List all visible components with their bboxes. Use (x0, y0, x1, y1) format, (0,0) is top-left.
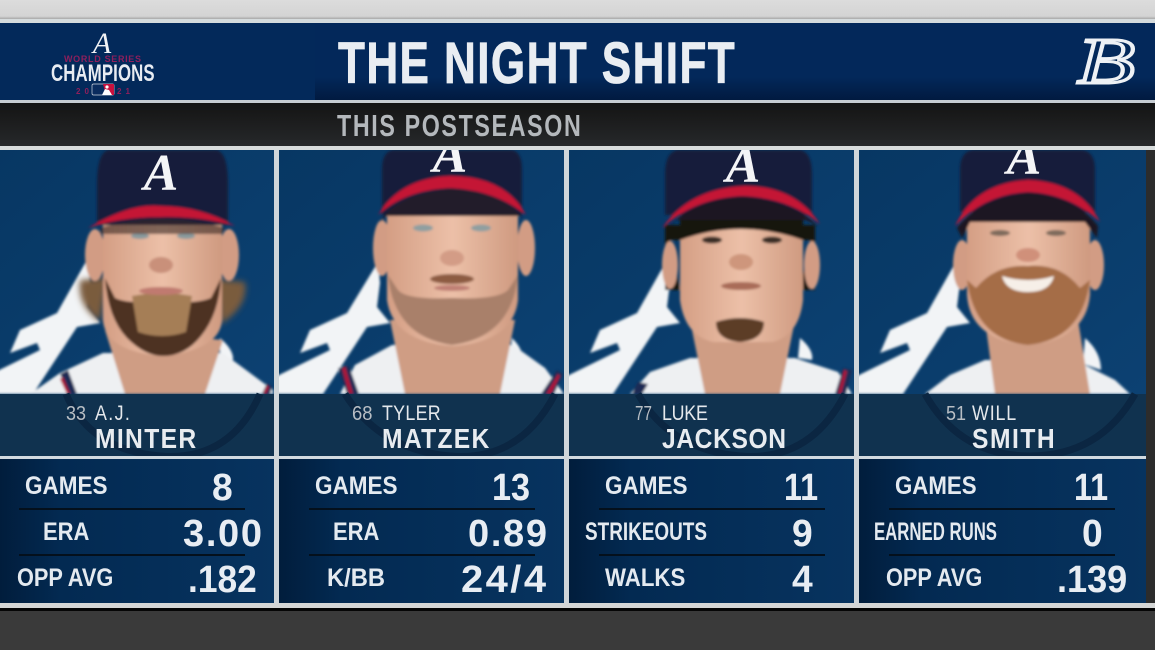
swoosh (855, 258, 970, 394)
panel: Minter photo (0, 145, 274, 394)
last name: JACKSON (662, 423, 786, 454)
stat: opp avg (17, 558, 257, 600)
stat: games (605, 467, 818, 509)
card: Matzek name (279, 394, 564, 456)
title: THE NIGHT SHIFT (338, 30, 735, 95)
stat: opp avg: .182 (188, 558, 257, 600)
stat: games: 13 (492, 465, 530, 508)
stat: opp avg (886, 557, 1127, 600)
stats: Smith (859, 459, 1146, 603)
stat: earned runs: EARNED RUNS (874, 518, 997, 546)
stat: opp avg: .139 (1057, 557, 1127, 600)
jersey number: 33 (66, 403, 86, 425)
logo: Braves World Series Champions: A (91, 27, 112, 60)
panel: Smith photo (855, 129, 1146, 394)
stat: walks: 4 (792, 558, 813, 600)
jersey number: 68 (352, 403, 372, 425)
first name: WILL (972, 402, 1016, 425)
stat: games (895, 467, 1108, 509)
stat: opp avg: OPP AVG (886, 564, 982, 591)
stat: earned runs: 0 (1082, 512, 1103, 554)
stat: era: ERA (333, 518, 379, 545)
stat: games: GAMES (25, 472, 107, 500)
stat: games: 8 (212, 466, 233, 508)
cap logo: A (430, 127, 467, 184)
stat: games: 11 (784, 467, 818, 509)
logo: Braves World Series Champions: 20 (76, 87, 90, 96)
cap logo: A (141, 145, 178, 202)
card: Jackson name (569, 394, 854, 456)
jersey number: 51 (946, 403, 966, 425)
stat: era (333, 513, 547, 555)
stat: walks: WALKS (605, 565, 685, 592)
subtitle band (0, 103, 1155, 146)
logo: Braves World Series Champions (51, 27, 155, 96)
last name: MINTER (95, 423, 196, 454)
stat: era: 0.89 (468, 513, 547, 555)
stats: Minter (0, 459, 274, 603)
logo: Braves World Series Champions: WORLD SERIES (64, 54, 141, 64)
jersey number: 77 (635, 402, 652, 425)
stat: games: 11 (1074, 467, 1108, 509)
stat: games: GAMES (315, 472, 397, 500)
last name: SMITH (972, 423, 1055, 454)
stat: opp avg: OPP AVG (17, 564, 113, 591)
swoosh (0, 258, 100, 394)
logo: Braves World Series Champions: CHAMPIONS (51, 60, 155, 87)
card: Smith name (859, 394, 1146, 456)
logo: Braves World Series Champions: 21 (117, 87, 131, 96)
stat: earned runs (874, 512, 1103, 554)
stat band separator (0, 456, 1146, 459)
cap logo: A (723, 137, 760, 194)
stat: era: ERA (43, 518, 89, 545)
column dividers (274, 150, 859, 603)
swoosh (565, 258, 680, 394)
stat: strikeouts: STRIKEOUTS (585, 518, 707, 546)
first name: TYLER (382, 402, 441, 425)
stat: games: GAMES (895, 473, 977, 500)
stat: games (315, 465, 530, 508)
stat: k/bb: K/BB (327, 564, 385, 592)
stat: walks (605, 558, 813, 600)
stat: strikeouts: 9 (792, 512, 813, 554)
logo: Bally script B: B (1077, 25, 1135, 98)
panel: Matzek photo (275, 127, 564, 394)
first name: A.J. (95, 402, 130, 425)
stat: era (43, 513, 262, 555)
stat: strikeouts (585, 512, 813, 554)
stats: Matzek (279, 459, 564, 603)
panel: Jackson photo (565, 137, 854, 394)
first name: LUKE (662, 402, 708, 425)
stats: Jackson (569, 459, 854, 603)
swoosh (275, 262, 390, 394)
header banner (0, 23, 1155, 100)
card: Minter name (0, 394, 274, 456)
stat: games (25, 466, 233, 508)
last name: MATZEK (382, 423, 489, 454)
subtitle: THIS POSTSEASON (337, 108, 581, 143)
stat: k/bb: 24/4 (461, 559, 546, 601)
stat: era: 3.00 (183, 513, 262, 555)
stat: games: GAMES (605, 472, 687, 500)
cap logo: A (1004, 129, 1041, 186)
stat: k/bb (327, 559, 546, 601)
